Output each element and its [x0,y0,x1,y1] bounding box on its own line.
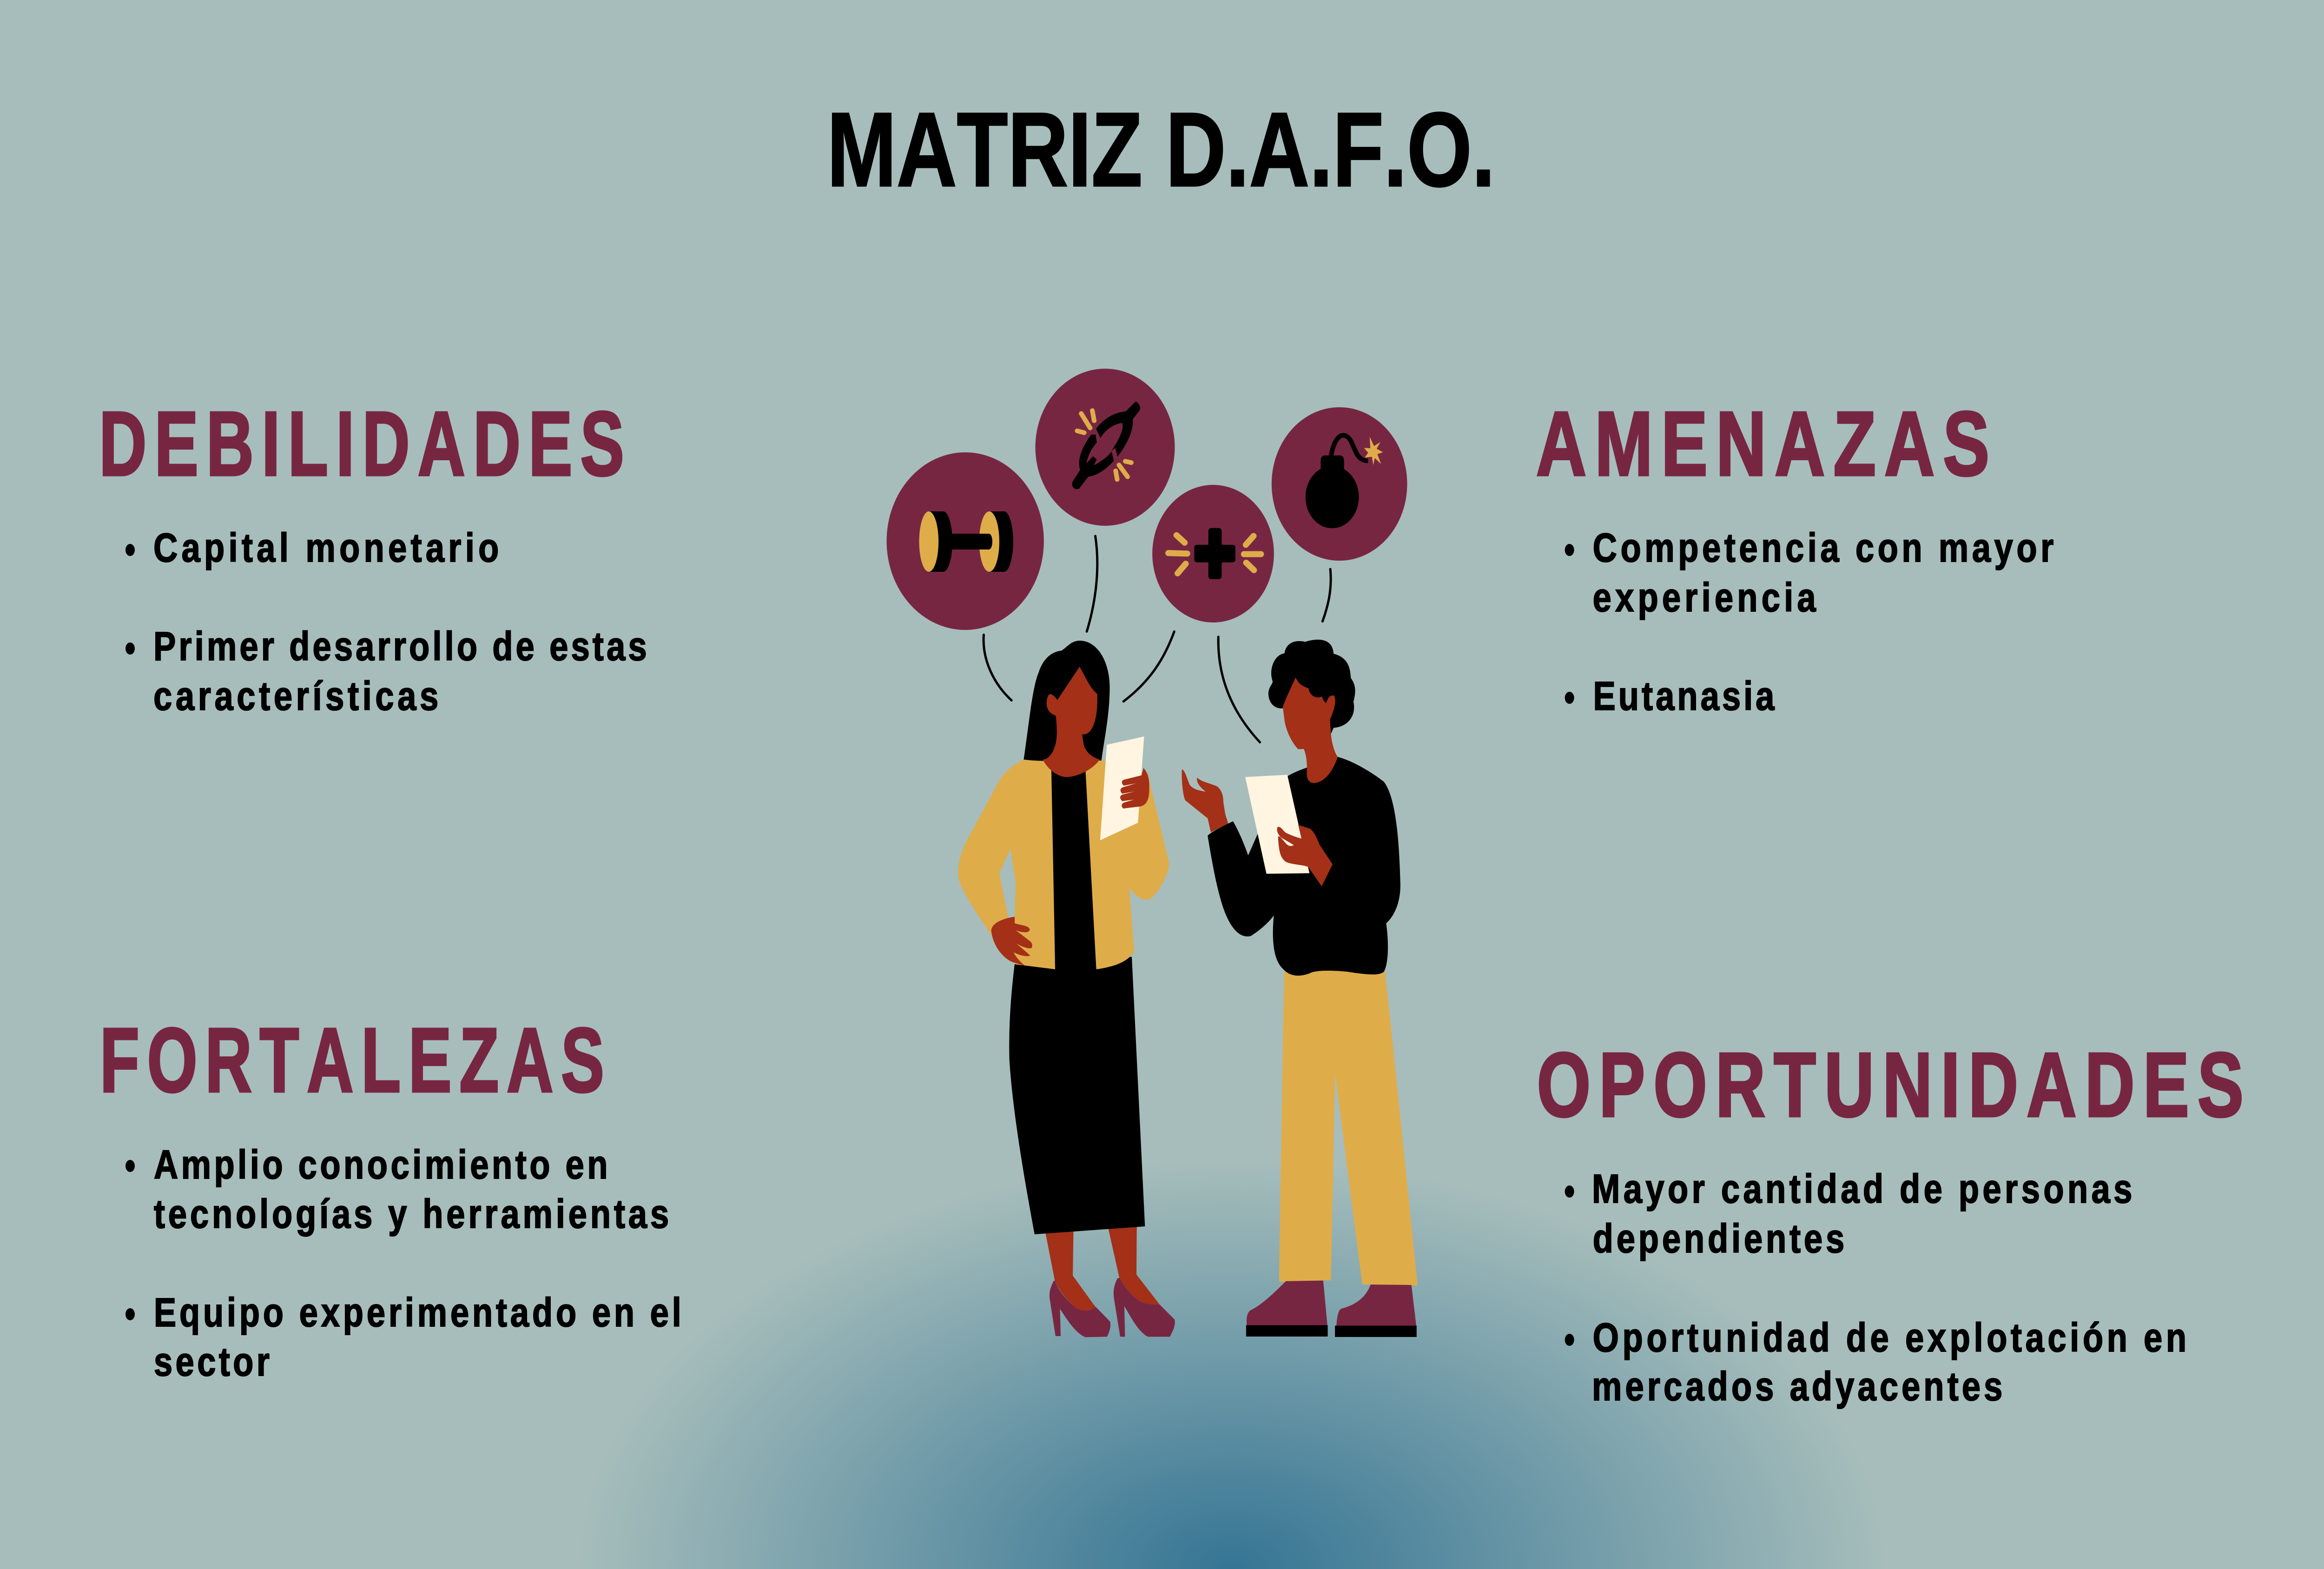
list: oportunidades [1565,1166,2186,1409]
heading: oportunidades: OPORTUNIDADES [1537,1034,2252,1136]
illustration: woman [958,641,1175,1337]
list: oportunidades: dependientes [1593,1216,1844,1261]
icon: dumbbell bubble [887,452,1044,630]
list: oportunidades: mercados adyacentes [1592,1364,2002,1409]
icon: plus bubble [1152,485,1274,622]
woman legs and shoes [1045,1226,1175,1337]
heading: fortalezas: FORTALEZAS [100,1010,612,1111]
illustration: man [1182,640,1418,1337]
list: amenazas: Eutanasia [1593,674,1775,718]
woman skirt [1009,957,1145,1234]
list: debilidades [125,525,647,718]
icon: broken chain bubble [1036,369,1175,526]
panel: oportunidades [1537,1034,2252,1409]
list: debilidades: características [153,674,438,718]
heading: debilidades: DEBILIDADES [99,393,632,495]
panel: fortalezas [100,1010,681,1384]
title: MATRIZ D.A.F.O. [827,91,1495,209]
list: fortalezas: tecnologías y herramientas [154,1192,669,1236]
list: amenazas: Competencia con mayor [1593,525,2053,570]
list: fortalezas: Equipo experimentado en el [154,1290,681,1335]
man upper body [1182,640,1400,976]
list: amenazas: experiencia [1593,575,1816,620]
woman upper body [958,641,1169,969]
list: fortalezas: Amplio conocimiento en [154,1142,608,1187]
list: amenazas [1565,525,2053,718]
panel: debilidades [99,393,647,718]
list: fortalezas [125,1142,681,1384]
icon: bomb bubble [1272,407,1407,561]
list: fortalezas: sector [154,1339,270,1384]
list: oportunidades: Mayor cantidad de personas [1592,1166,2133,1211]
man shoes [1246,1280,1417,1337]
list: debilidades: Primer desarrollo de estas [153,624,647,669]
heading: amenazas: AMENAZAS [1536,393,1998,495]
man trousers [1279,962,1418,1285]
list: oportunidades: Oportunidad de explotación en [1593,1315,2186,1360]
connector lines [984,536,1331,742]
panel: amenazas [1536,393,2053,718]
list: debilidades: Capital monetario [153,525,499,570]
